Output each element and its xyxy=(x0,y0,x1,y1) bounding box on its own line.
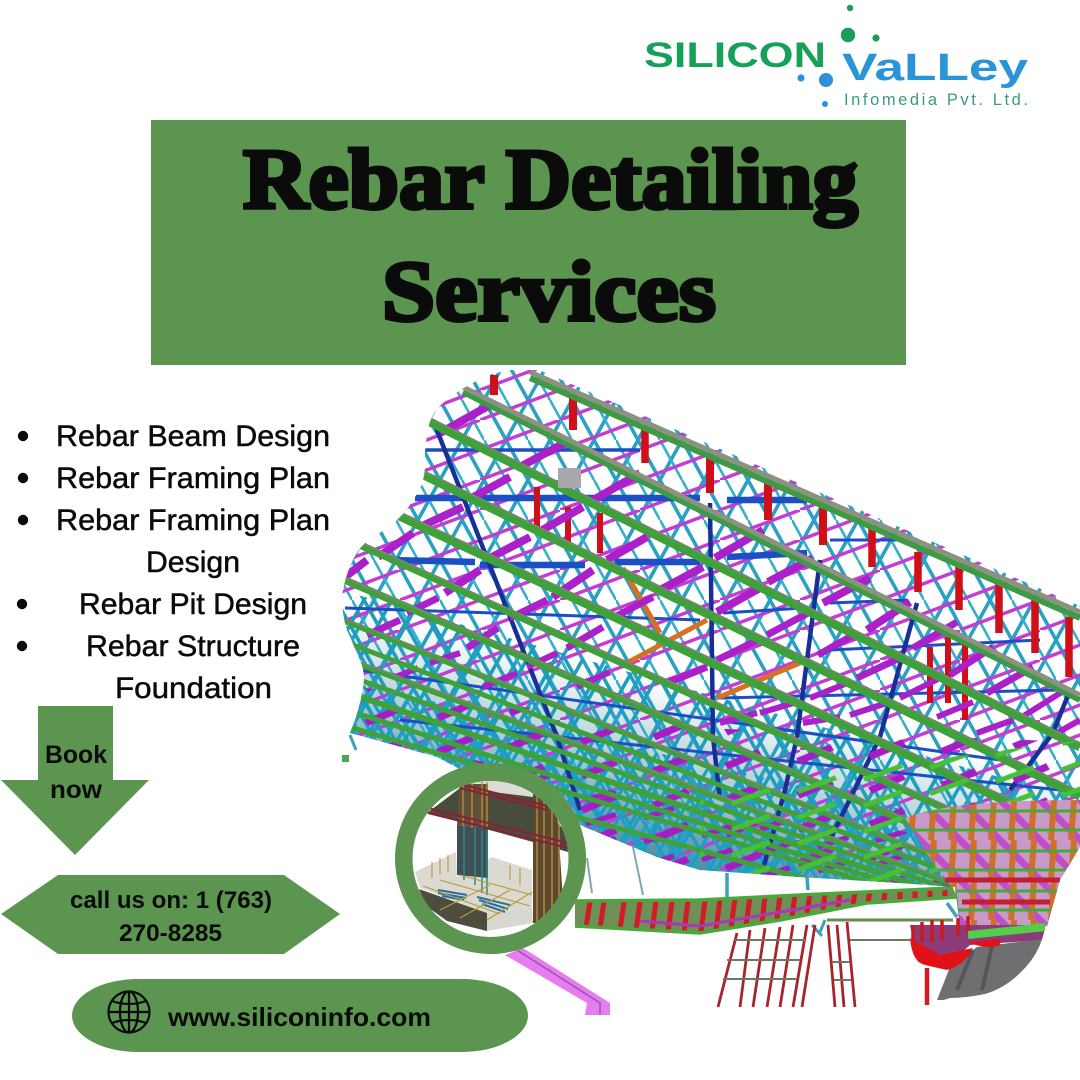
thin support cables xyxy=(350,735,957,936)
navy diagonals xyxy=(433,420,1070,880)
inset rebar drawing xyxy=(415,778,568,931)
list item: pit design: Rebar Pit Design xyxy=(79,588,307,621)
logo tagline: Infomedia Pvt. Ltd. xyxy=(844,91,1028,109)
phone line 1: call us on: 1 (763) xyxy=(70,887,272,914)
red leg xyxy=(925,968,929,1005)
icon: globe xyxy=(108,992,150,1032)
walkway rails xyxy=(575,888,957,933)
lower dense tint xyxy=(340,600,1080,940)
pink beam shading xyxy=(517,950,600,1015)
arrow: book now xyxy=(1,706,149,855)
footing slab top xyxy=(415,852,532,913)
logo word: silicon: SILICON xyxy=(644,36,826,75)
red ladder group 2 xyxy=(828,922,910,1007)
list item: framing plan design: Rebar Framing Plan xyxy=(56,504,330,537)
title line 2: Services xyxy=(382,243,716,339)
walkway hatching xyxy=(586,888,945,933)
arrow label: now: now xyxy=(50,776,103,804)
walkway deck xyxy=(575,888,957,933)
pill: website xyxy=(72,979,528,1052)
footing front dark xyxy=(419,889,487,931)
list item: beam design: Rebar Beam Design xyxy=(56,420,330,453)
list item continuation: foundation: Foundation xyxy=(115,672,272,705)
lower lattice xyxy=(350,685,1078,918)
title panel xyxy=(151,120,906,365)
walkway magenta lower strip xyxy=(640,900,850,926)
orange braces xyxy=(623,568,800,698)
logo word: valley: VaLLey xyxy=(842,47,1028,89)
service list xyxy=(17,420,330,705)
orange vertical rebars xyxy=(463,782,559,922)
bottom purple rows xyxy=(380,740,1072,925)
red and grey pedestal, clipped by blob xyxy=(910,916,1050,1005)
lattice vault lower right xyxy=(905,800,1080,926)
list item: structure foundation: Rebar Structure xyxy=(86,630,300,663)
roof truss xyxy=(463,372,1080,700)
list item continuation: design: Design xyxy=(146,546,240,579)
red support posts xyxy=(913,916,968,942)
hexagon: phone number xyxy=(1,875,340,954)
red ladder group 1 xyxy=(718,925,815,1007)
pink steel beam xyxy=(505,948,610,1015)
footing yellow rebar grid xyxy=(423,855,532,920)
top concrete xyxy=(460,781,534,797)
structural steel mesh illustration xyxy=(340,370,1080,960)
red bracket bowls xyxy=(910,938,1000,970)
left column xyxy=(457,825,488,878)
pedestal shading xyxy=(957,946,992,990)
green beam family xyxy=(344,418,1080,926)
thin purple bracing xyxy=(340,370,1080,870)
bright green lower chords xyxy=(700,740,1080,900)
mid lattice xyxy=(342,591,1072,924)
inset circle: rebar column and footing xyxy=(395,763,586,954)
right column xyxy=(533,793,563,923)
deck below vault xyxy=(910,925,1045,962)
lower walkway rail xyxy=(827,918,953,922)
grey beam edges xyxy=(344,418,1080,918)
column blue rebars xyxy=(464,826,487,895)
grey pedestal xyxy=(937,938,1050,1000)
list item: framing plan: Rebar Framing Plan xyxy=(56,462,330,495)
red posts xyxy=(494,375,1069,720)
bright green blocks xyxy=(968,927,1046,935)
red horizontal ties in vault xyxy=(945,880,1060,902)
beam xyxy=(427,788,568,852)
footing blue rebars xyxy=(438,890,510,912)
small green fragment xyxy=(342,755,349,762)
logo: Silicon Valley Infomedia xyxy=(644,5,1028,109)
grey box node xyxy=(558,468,581,488)
upper lattice xyxy=(340,370,1080,870)
lower purple rows xyxy=(364,688,1050,918)
icon: logo dots xyxy=(797,5,880,107)
website url: www.siliconinfo.com xyxy=(167,1002,431,1032)
purple beam segments xyxy=(345,405,1080,733)
red horizontal rebars xyxy=(428,784,568,848)
blue horizontals xyxy=(345,450,1060,790)
lower structure: walkway and supports xyxy=(342,735,1050,1015)
bullets xyxy=(17,431,28,651)
arrow label: book: Book xyxy=(45,741,107,769)
phone line 2: 270-8285 xyxy=(119,920,222,947)
title line 1: Rebar Detailing xyxy=(243,131,858,227)
footing front light xyxy=(487,907,533,931)
left column top xyxy=(457,784,488,828)
